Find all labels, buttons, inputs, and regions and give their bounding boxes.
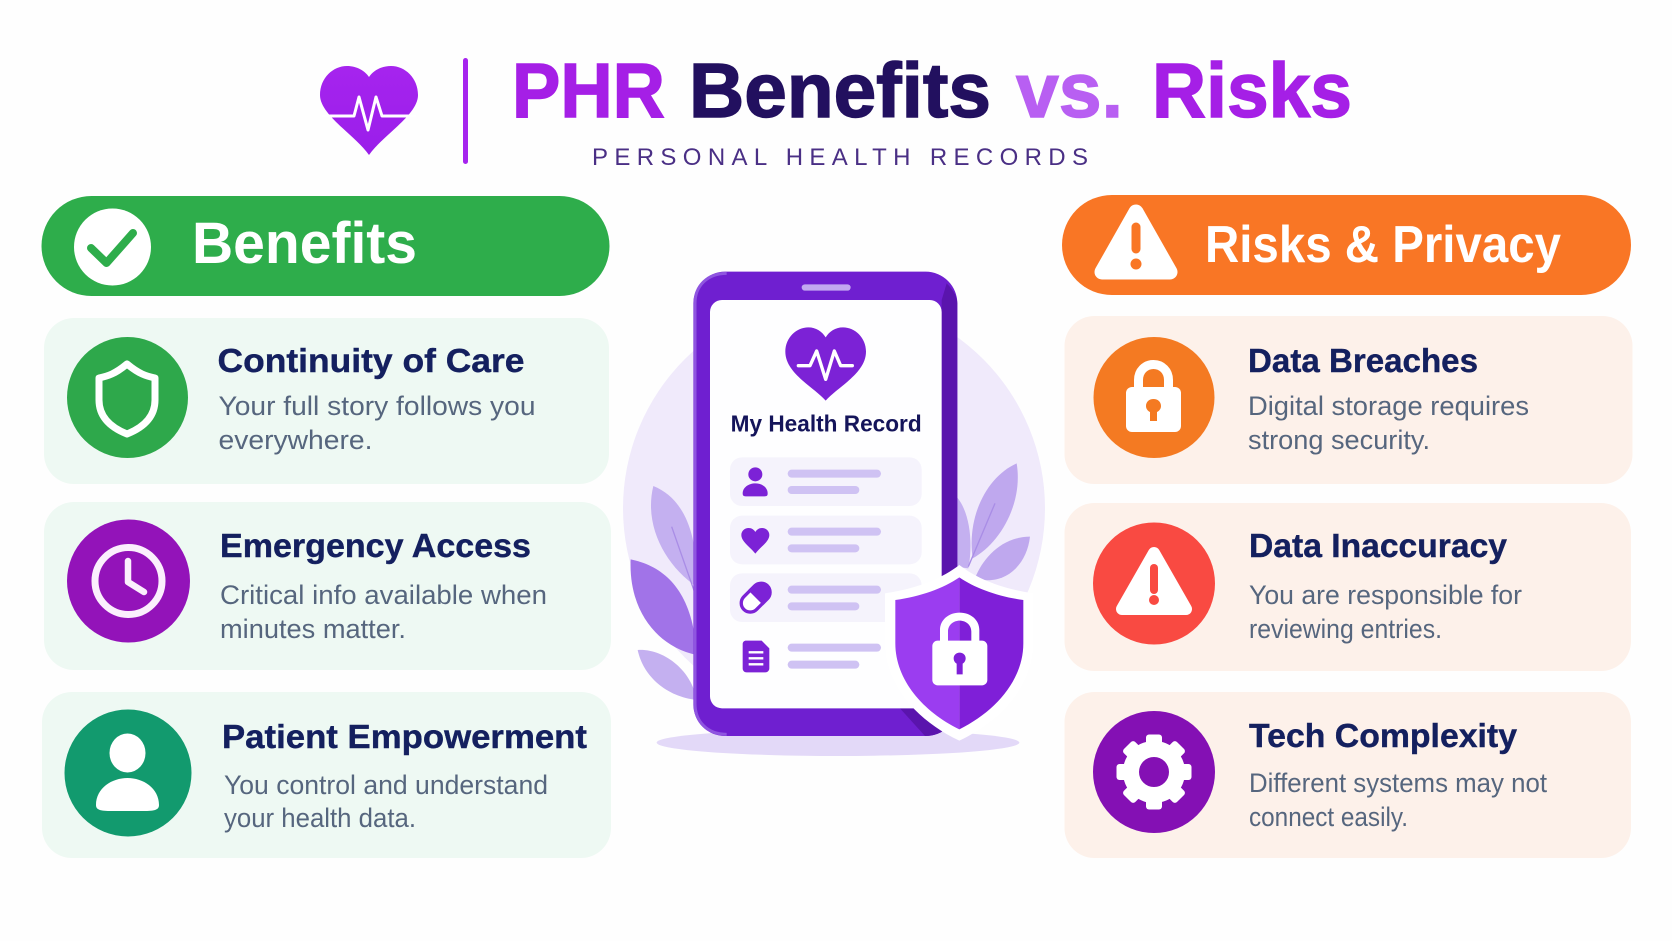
panel: center phone illustration <box>623 272 1045 756</box>
card: emergency access: Critical info available when <box>220 580 547 610</box>
card: patient empowerment: You control and understand <box>224 770 548 800</box>
card: data breaches: strong security. <box>1248 425 1430 455</box>
title: vs. <box>1016 48 1123 134</box>
card: patient empowerment: your health data. <box>224 803 416 833</box>
risks header pill <box>1062 195 1631 295</box>
card: continuity of care: Your full story follows you <box>218 391 536 421</box>
leaves <box>631 463 1030 700</box>
card: data inaccuracy: You are responsible for <box>1249 580 1522 610</box>
card: data inaccuracy: reviewing entries. <box>1249 614 1442 644</box>
card: continuity of care: Continuity of Care <box>218 342 524 379</box>
security shield with lock <box>885 565 1033 741</box>
card: tech complexity: Tech Complexity <box>1249 717 1518 754</box>
title: Risks <box>1152 48 1352 134</box>
panel: benefits <box>42 196 611 858</box>
header <box>320 48 1352 171</box>
card: patient empowerment: Patient Empowerment <box>222 718 587 755</box>
card: data breaches: Digital storage requires <box>1248 391 1529 421</box>
header divider <box>463 58 468 164</box>
card: tech complexity <box>1064 692 1631 858</box>
card: continuity of care <box>44 318 609 484</box>
phone screen <box>710 300 942 708</box>
title <box>512 48 1352 134</box>
subtitle: PERSONAL HEALTH RECORDS <box>592 144 1088 171</box>
card: emergency access: Emergency Access <box>220 527 531 564</box>
card: data inaccuracy <box>1064 503 1631 671</box>
icon: document <box>743 641 769 672</box>
icon: pill <box>736 577 776 617</box>
title: PHR <box>512 48 665 134</box>
title: Benefits <box>689 48 991 134</box>
screen title: My Health Record <box>731 411 922 437</box>
background circle <box>623 297 1045 719</box>
icon: heart <box>741 528 769 554</box>
card: tech complexity: Different systems may not <box>1249 768 1548 798</box>
card: patient empowerment <box>42 692 611 858</box>
screen heart icon <box>785 327 866 401</box>
panel: risks and privacy <box>1062 195 1632 858</box>
benefits header pill: Benefits <box>192 211 417 276</box>
card: emergency access <box>44 502 611 670</box>
icon: heart with pulse <box>320 66 418 155</box>
record rows <box>730 457 922 669</box>
icon: person <box>743 467 768 496</box>
ground shadow <box>657 729 1019 756</box>
card: emergency access: minutes matter. <box>220 614 406 644</box>
phone speaker <box>802 284 851 291</box>
phone body <box>693 272 957 736</box>
benefits header pill <box>42 196 610 296</box>
card: data breaches: Data Breaches <box>1248 342 1478 379</box>
card: data inaccuracy: Data Inaccuracy <box>1249 527 1508 564</box>
card: continuity of care: everywhere. <box>218 425 372 455</box>
card: tech complexity: connect easily. <box>1249 802 1408 832</box>
risks header pill: Risks & Privacy <box>1205 216 1561 274</box>
card: data breaches <box>1064 316 1632 484</box>
